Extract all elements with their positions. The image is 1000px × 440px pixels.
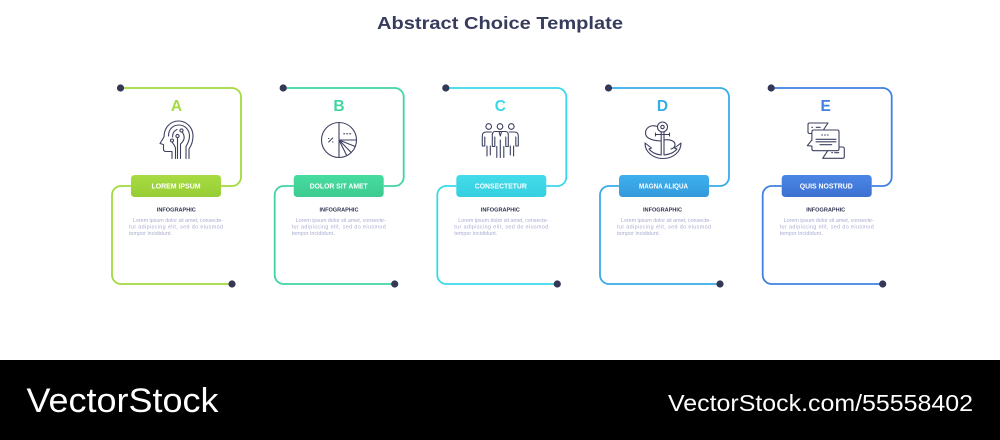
label text A: LOREM IPSUM — [152, 184, 201, 190]
subheading E: INFOGRAPHIC — [806, 208, 845, 214]
start dot A — [117, 84, 124, 92]
body text E: tempor incididunt. — [780, 231, 823, 237]
panel: card D — [600, 84, 729, 288]
label text B: DOLOR SIT AMET — [310, 184, 368, 190]
end dot A — [228, 280, 236, 288]
body text B: tempor incididunt. — [292, 231, 335, 237]
panel: card A — [112, 84, 241, 288]
connector line E — [763, 88, 892, 284]
label pill B — [294, 175, 384, 197]
end dot D — [716, 280, 724, 288]
body text E — [780, 218, 874, 237]
body text A: tur adipiscing elit, sed do eiusmod — [129, 224, 223, 230]
body text A — [129, 218, 223, 237]
label pill D — [619, 175, 709, 197]
footer url: VectorStock.com/55558402 — [668, 390, 973, 416]
label text E: QUIS NOSTRUD — [800, 184, 853, 190]
title: Abstract Choice Template — [377, 13, 623, 33]
label pill E — [782, 175, 872, 197]
body text D: tur adipiscing elit, sed do eiusmod — [617, 224, 711, 230]
body text C — [454, 218, 549, 237]
body text C: tempor incididunt. — [454, 231, 497, 237]
end dot E — [879, 280, 886, 288]
body text E: tur adipiscing elit, sed do eiusmod — [780, 224, 874, 230]
body text B: tur adipiscing elit, sed do eiusmod — [292, 224, 386, 230]
letter B: B — [333, 98, 345, 115]
icon: head with circuit — [160, 121, 193, 158]
footer band — [0, 360, 1000, 440]
start dot D — [605, 84, 612, 92]
body text B — [292, 218, 386, 237]
start dot E — [768, 84, 775, 92]
body text D: tempor incididunt. — [617, 231, 660, 237]
body text C: Lorem ipsum dolor sit amet, consecte- — [458, 218, 549, 224]
subheading D: INFOGRAPHIC — [643, 208, 682, 214]
letter D: D — [657, 98, 668, 115]
icon: group of people — [482, 124, 518, 158]
footer logo: VectorStock — [26, 382, 219, 420]
panel: card C — [437, 84, 566, 288]
body text A: Lorem ipsum dolor sit amet, consecte- — [133, 218, 223, 224]
start dot B — [280, 84, 287, 92]
start dot C — [442, 84, 449, 92]
letter C: C — [495, 98, 506, 115]
body text E: Lorem ipsum dolor sit amet, consecte- — [784, 218, 874, 224]
icon: pie chart — [322, 122, 356, 158]
subheading A: INFOGRAPHIC — [157, 208, 196, 214]
end dot C — [554, 280, 561, 288]
letter A: A — [171, 98, 182, 115]
label pill A — [131, 175, 221, 197]
connector line C — [437, 88, 566, 284]
subheading C: INFOGRAPHIC — [481, 208, 520, 214]
label pill C — [456, 175, 546, 197]
letter E: E — [821, 98, 831, 115]
body text C: tur adipiscing elit, sed do eiusmod — [454, 224, 548, 230]
body text B: Lorem ipsum dolor sit amet, consecte- — [296, 218, 386, 224]
subheading B: INFOGRAPHIC — [320, 208, 359, 214]
panel: card E — [763, 84, 892, 288]
connector line A — [112, 88, 241, 284]
label text C: CONSECTETUR — [475, 184, 527, 190]
label text D: MAGNA ALIQUA — [639, 184, 688, 190]
icon: anchor — [645, 122, 681, 158]
connector line D — [600, 88, 729, 284]
body text D: Lorem ipsum dolor sit amet, consecte- — [621, 218, 711, 224]
icon: speech bubbles — [807, 123, 844, 158]
connector line B — [275, 88, 404, 284]
body text D — [617, 218, 711, 237]
panel: card B — [275, 84, 404, 288]
body text A: tempor incididunt. — [129, 231, 172, 237]
end dot B — [391, 280, 398, 288]
